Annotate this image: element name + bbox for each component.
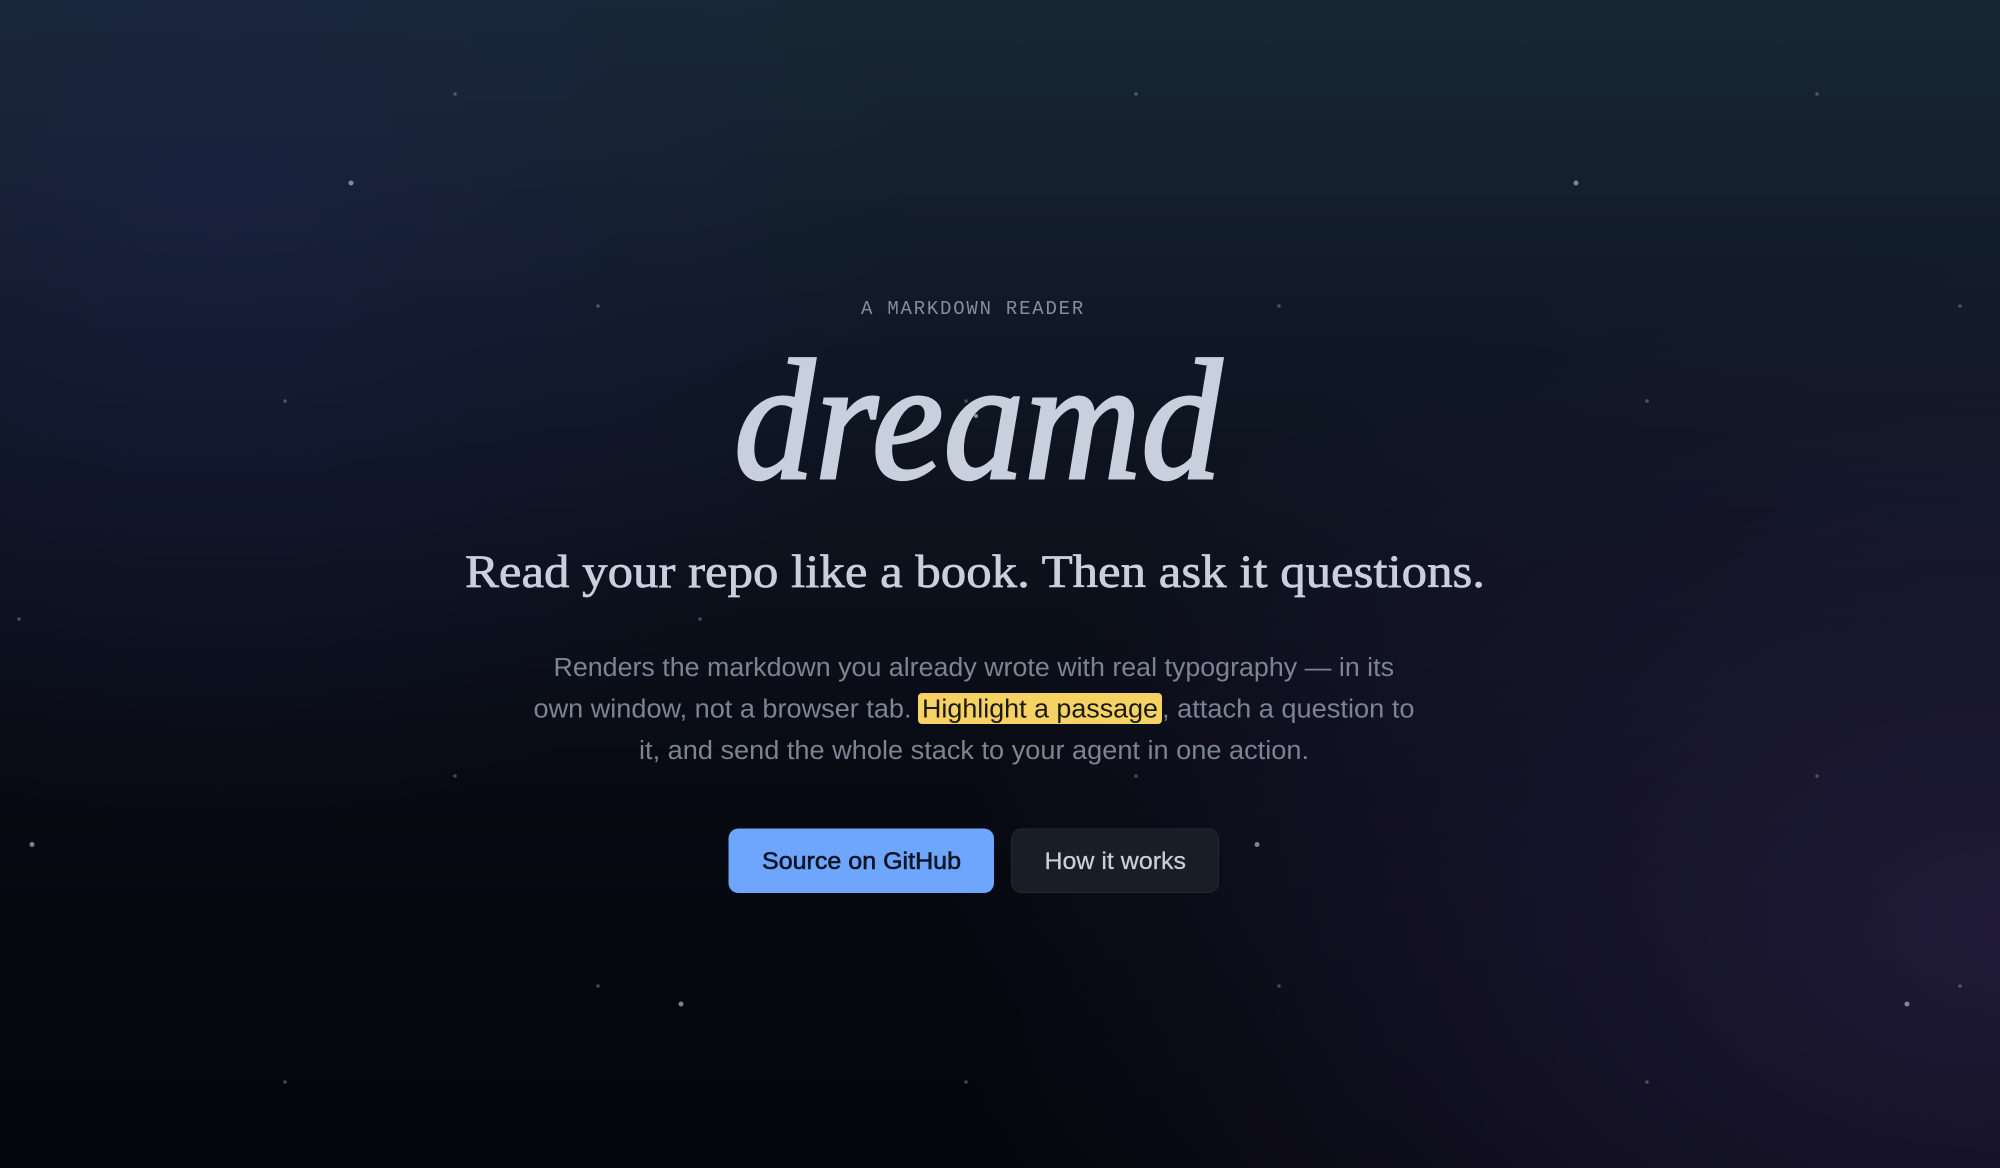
description paragraph: own window, not a browser tab. [534,696,912,724]
eyebrow label: A MARKDOWN READER [861,298,1085,320]
secondary button: How it works: How it works [1044,848,1186,875]
small star over title [974,414,978,418]
primary button: Source on GitHub: Source on GitHub [762,848,961,875]
description paragraph: , attach a question to [1162,696,1414,724]
tagline: Read your repo like a book. Then ask it questions. [465,546,1485,598]
secondary button: How it works [1012,829,1218,892]
description paragraph: it, and send the whole stack to your agent in one action. [639,737,1309,765]
primary button: Source on GitHub [728,828,994,893]
highlighted passage: Highlight a passage [922,696,1158,724]
title: dreamd [734,326,1223,516]
description paragraph [534,654,1414,765]
description paragraph: Renders the markdown you already wrote with real typography — in its [554,654,1394,682]
